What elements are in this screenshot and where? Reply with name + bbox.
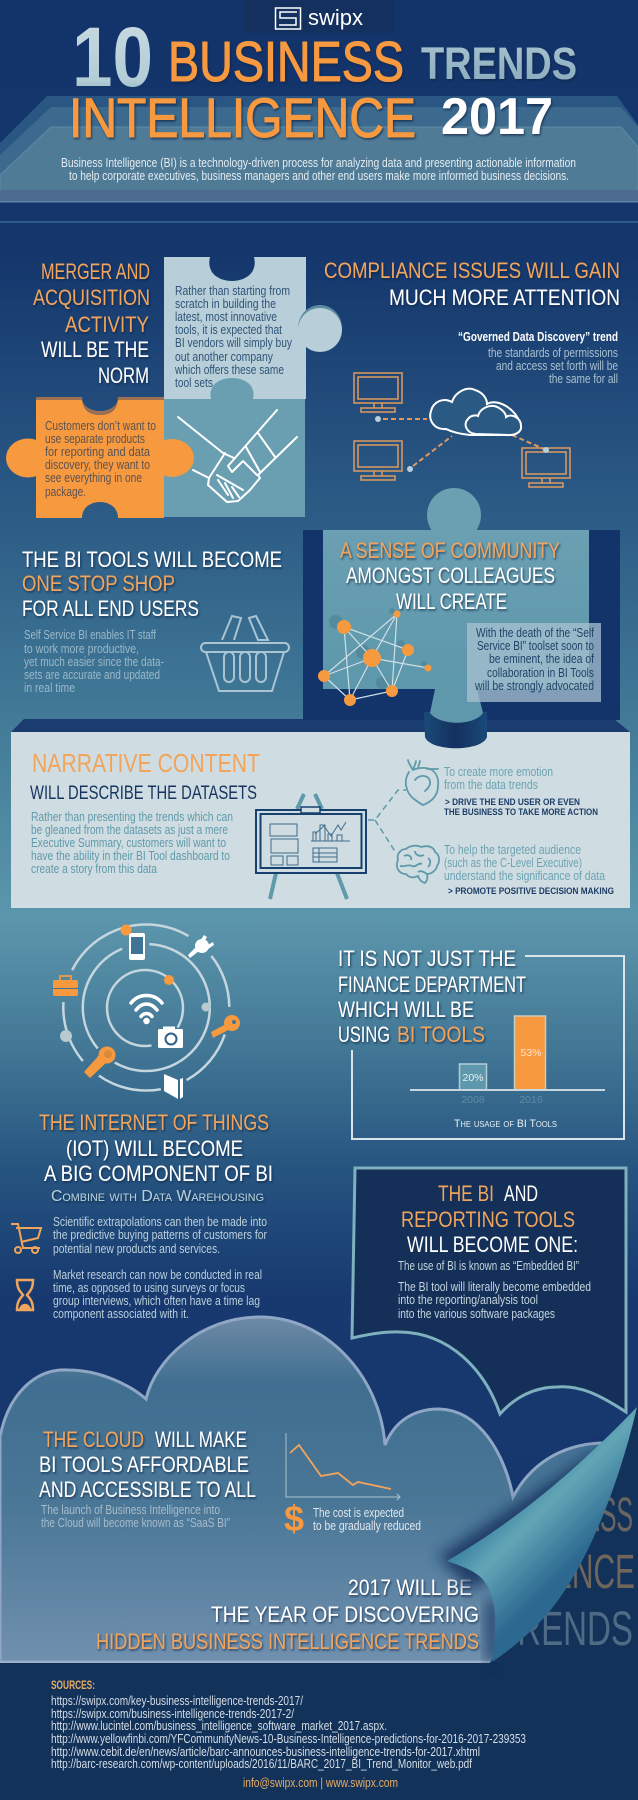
callout: self service death: Service BI” toolset soon to — [477, 639, 594, 653]
logo: swipx — [308, 5, 363, 30]
heading: community: AMONGST COLLEAGUES — [346, 563, 555, 588]
source list: http://www.lucintel.com/business_intelligence_software_market_2017.aspx. — [51, 1719, 387, 1733]
heading: finance — [338, 946, 526, 1047]
text: targeted audience — [444, 843, 614, 897]
icon: handshake — [178, 410, 297, 502]
panel: embedded BI — [352, 1168, 626, 1414]
source list: http://www.yellowfinbi.com/YFCommunityNews-10-Business-Intelligence-predictions-for-2016-2017-239353 — [51, 1732, 526, 1746]
puzzle: light piece — [164, 257, 342, 399]
page curl — [438, 1407, 637, 1662]
heading: finance: WHICH WILL BE — [338, 997, 474, 1022]
heading: internet of things — [39, 1110, 273, 1205]
source list: http://barc-research.com/wp-content/uploads/2016/11/BARC_2017_BI_Trend_Monitor_web.pdf — [51, 1757, 472, 1771]
heading: one stop shop: THE BI TOOLS WILL BECOME — [22, 547, 282, 572]
text: self service — [24, 628, 164, 695]
icon: presentation board — [256, 794, 366, 899]
callout: self service death: With the death of the “Self — [476, 626, 594, 640]
title: BUSINESS — [168, 30, 404, 94]
heading: one stop shop: ONE STOP SHOP — [22, 571, 175, 596]
heading: finance: IT IS NOT JUST THE — [338, 946, 516, 971]
heading: one stop shop — [22, 547, 282, 621]
callout: self service death: collaboration in BI Tools — [487, 666, 594, 680]
heading: embedded: AND — [504, 1181, 538, 1206]
bar chart: The usage of BI Tools — [454, 1118, 557, 1130]
text: cost — [313, 1506, 421, 1533]
arrow: dashed connector — [368, 790, 406, 853]
text: emotion — [444, 765, 598, 818]
text: saas: the Cloud will become known as “SaaS BI” — [41, 1516, 230, 1530]
heading: the cloud: WILL MAKE — [155, 1427, 247, 1452]
text: emotion: THE BUSINESS TO TAKE MORE ACTION — [444, 807, 598, 818]
source list: https://swipx.com/key-business-intelligence-trends-2017/ — [51, 1694, 303, 1708]
icon: camera — [158, 1026, 183, 1048]
text: orange piece copy: discovery, they want to — [45, 458, 150, 472]
footer background — [0, 1662, 638, 1800]
title: 10 — [72, 10, 153, 104]
text: light piece copy: tool sets — [175, 376, 213, 390]
text: light piece copy: latest, most innovative — [175, 310, 277, 324]
panel: finance department — [338, 946, 624, 1139]
text: orange piece copy: package. — [45, 485, 86, 499]
heading: merger — [33, 259, 150, 388]
heading: community — [340, 538, 560, 614]
heading: merger: MERGER AND — [41, 259, 150, 284]
panel: community — [11, 488, 630, 732]
heading: merger: ACQUISITION — [33, 285, 150, 310]
sources: SOURCES: — [51, 1678, 95, 1692]
source list: http://www.cebit.de/en/news/article/barc-announces-business-intelligence-trends-for-2017.xhtml — [51, 1745, 480, 1759]
heading: community: A SENSE OF COMMUNITY — [340, 538, 560, 563]
icon: plug — [188, 935, 214, 958]
heading: embedded: WILL BECOME ONE: — [407, 1232, 578, 1257]
text: market research — [53, 1268, 262, 1321]
text: orange piece copy: see everything in one — [45, 471, 142, 485]
icon: phone — [129, 933, 145, 960]
text: predictive buying: the predictive buying patterns of customers for — [53, 1228, 267, 1242]
heading: narrative — [30, 748, 260, 804]
bar chart: 2016 — [519, 1094, 543, 1106]
text: emotion: from the data trends — [444, 778, 538, 792]
closing statement: THE YEAR OF DISCOVERING — [211, 1602, 479, 1627]
text: self service: sets are accurate and updated — [24, 668, 160, 682]
text: orange piece copy: use separate products — [45, 432, 145, 446]
closing statement — [96, 1575, 479, 1654]
bar chart: 2008 — [461, 1094, 485, 1106]
panel: the cloud — [0, 1317, 638, 1662]
bar chart: 53% — [520, 1047, 542, 1059]
callout: self service death: be eminent, the idea of — [489, 652, 594, 666]
heading: community: WILL CREATE — [396, 589, 507, 614]
heading: internet of things: Combine with Data Warehousing — [51, 1188, 264, 1205]
heading: internet of things: (IOT) WILL BECOME — [66, 1136, 243, 1161]
text: narrative body: Rather than presenting the trends which can — [31, 810, 233, 824]
heading: the cloud: AND ACCESSIBLE TO ALL — [39, 1477, 256, 1502]
heading: narrative: WILL DESCRIBE THE DATASETS — [30, 783, 257, 804]
icon: dollar: $ — [284, 1498, 304, 1539]
title: TRENDS — [421, 38, 577, 89]
text: market research: group interviews, which often have a time lag — [53, 1294, 260, 1308]
title: 2017 — [441, 88, 553, 146]
title: INTELLIGENCE — [69, 86, 416, 149]
text: light piece copy: tools, it is expected that — [175, 323, 282, 337]
text: embedded body: into the various software packages — [398, 1307, 555, 1321]
text: emotion: > DRIVE THE END USER OR EVEN — [445, 797, 580, 808]
icon: key — [211, 1015, 240, 1038]
text: self service: Self Service BI enables IT staff — [24, 628, 156, 642]
text: targeted audience: (such as the C-Level Executive) — [444, 856, 582, 870]
text: light piece copy: which offers these same — [174, 363, 284, 377]
icon: wifi — [131, 996, 162, 1023]
text: emotion: To create more emotion — [444, 765, 553, 779]
icon: cloud network — [354, 373, 570, 487]
heading: the cloud: BI TOOLS AFFORDABLE — [39, 1452, 249, 1477]
icon: brain — [397, 846, 439, 883]
puzzle stalk — [424, 689, 487, 748]
bar chart — [410, 1016, 605, 1130]
logo — [244, 0, 394, 33]
sources — [51, 1678, 526, 1790]
heading: merger: ACTIVITY — [65, 312, 149, 337]
text: light piece copy — [174, 284, 293, 390]
icon: briefcase — [53, 976, 78, 996]
heading: embedded: THE BI — [438, 1181, 494, 1206]
text: embedded body — [398, 1259, 591, 1321]
heading: finance: BI TOOLS — [397, 1022, 485, 1047]
icon: book — [164, 1074, 183, 1099]
text: self service: yet much easier since the data- — [24, 655, 164, 669]
text: cost: The cost is expected — [313, 1506, 404, 1520]
text: targeted audience: To help the targeted audience — [444, 843, 581, 857]
panel: narrative content — [11, 689, 630, 908]
text: embedded body: into the reporting/analysis tool — [398, 1293, 538, 1307]
puzzle: orange piece — [6, 397, 194, 518]
closing statement: 2017 WILL BE — [348, 1575, 472, 1600]
text: light piece copy: Rather than starting from — [175, 284, 290, 298]
text: light piece copy: scratch in building the — [175, 297, 276, 311]
source list: https://swipx.com/business-intelligence-trends-2017-2/ — [51, 1707, 294, 1721]
text: orange piece copy: for reporting and data — [45, 445, 150, 459]
heading: the cloud: THE CLOUD — [43, 1427, 144, 1452]
icon: shopping cart — [11, 1224, 41, 1253]
icon: heart — [406, 760, 438, 805]
text: targeted audience: understand the significance of data — [444, 869, 605, 883]
closing statement: HIDDEN BUSINESS INTELLIGENCE TRENDS — [96, 1629, 479, 1654]
bar chart: 20% — [462, 1072, 484, 1084]
text: governed data discovery — [458, 330, 618, 386]
text: embedded body: The BI tool will literally become embedded — [398, 1280, 591, 1294]
text: narrative body: have the ability in their BI Tool dashboard to — [31, 849, 230, 863]
text: market research: Market research can now be conducted in real — [53, 1268, 262, 1282]
source list — [51, 1694, 526, 1771]
text: light piece copy: BI vendors will simply buy — [175, 336, 293, 350]
heading: the cloud — [39, 1427, 256, 1502]
text: targeted audience: > PROMOTE POSITIVE DECISION MAKING — [448, 886, 614, 897]
puzzle: teal handshake piece — [164, 399, 305, 517]
text: narrative body: be gleaned from the datasets as just a mere — [31, 823, 228, 837]
text: narrative body: Executive Summary, customers will want to — [31, 836, 226, 850]
callout: self service death: will be strongly advocated — [474, 679, 594, 693]
text: market research: time, as opposed to using surveys or focus — [53, 1281, 245, 1295]
revealed page corner — [490, 1408, 638, 1662]
heading: embedded: REPORTING TOOLS — [401, 1207, 575, 1232]
text: predictive buying — [53, 1215, 267, 1256]
contact: info@swipx.com | www.swipx.com — [243, 1776, 398, 1790]
heading: embedded — [401, 1181, 578, 1257]
header band — [0, 96, 638, 223]
intro text — [61, 156, 576, 183]
text: predictive buying: Scientific extrapolations can then be made into — [53, 1215, 267, 1229]
text: embedded body: The use of BI is known as “Embedded BI” — [398, 1259, 579, 1273]
heading: one stop shop: FOR ALL END USERS — [22, 596, 199, 621]
text: predictive buying: potential new products and services. — [53, 1242, 220, 1256]
icon: basket — [201, 616, 289, 691]
heading: merger: NORM — [98, 363, 149, 388]
heading: narrative: NARRATIVE CONTENT — [32, 748, 260, 778]
text: cost: to be gradually reduced — [313, 1519, 421, 1533]
text: orange piece copy: Customers don’t want to — [45, 419, 156, 433]
title — [69, 10, 577, 149]
icon: internet of things rings — [53, 924, 240, 1099]
text: narrative body — [31, 810, 233, 876]
text: light piece copy: out another company — [175, 350, 274, 364]
icon: flashlight — [84, 1046, 116, 1078]
text: market research: component associated with it. — [53, 1307, 189, 1321]
text: orange piece copy — [45, 419, 156, 499]
text: self service: in real time — [24, 681, 75, 695]
heading: internet of things: THE INTERNET OF THINGS — [39, 1110, 269, 1135]
icon: hourglass — [17, 1280, 33, 1310]
icon: network — [318, 608, 432, 706]
text: narrative body: create a story from this data — [31, 862, 157, 876]
heading: merger: WILL BE THE — [41, 337, 149, 362]
text: governed data discovery: the same for all — [549, 372, 618, 386]
heading: finance: FINANCE DEPARTMENT — [338, 972, 526, 997]
heading: finance: USING — [338, 1022, 390, 1047]
text: saas: The launch of Business Intelligence into — [41, 1503, 220, 1517]
heading: compliance — [324, 258, 620, 310]
callout: self service death — [467, 623, 601, 702]
text: self service: to work more productive, — [24, 642, 139, 656]
heading: internet of things: A BIG COMPONENT OF BI — [44, 1161, 273, 1186]
text: saas — [41, 1503, 230, 1530]
line chart — [286, 1433, 400, 1500]
